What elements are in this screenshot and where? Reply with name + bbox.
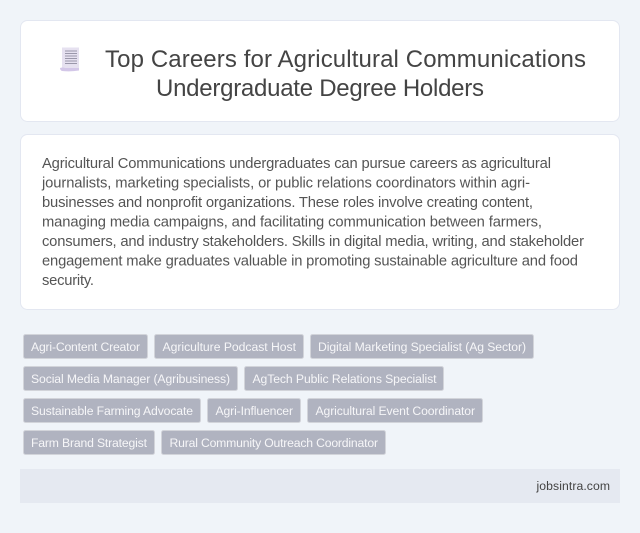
description text <box>41 156 584 289</box>
title <box>105 46 586 102</box>
footer source: jobsintra.com <box>536 479 610 493</box>
career tags <box>24 334 534 454</box>
tag: Agricultural Event Coordinator <box>316 404 475 418</box>
description text: engagement make graduates valuable in promoting sustainable agriculture and food <box>42 254 578 270</box>
icon: document scroll <box>60 48 79 71</box>
tag <box>310 334 534 358</box>
tag <box>24 334 148 358</box>
tag: Digital Marketing Specialist (Ag Sector) <box>318 340 526 354</box>
tag: Social Media Manager (Agribusiness) <box>31 372 230 386</box>
tag: AgTech Public Relations Specialist <box>252 372 437 386</box>
tag <box>24 398 200 422</box>
description text: businesses and nonprofit organizations. These roles involve creating content, <box>42 195 533 211</box>
description text: managing media campaigns, and facilitating communication between farmers, <box>42 214 542 230</box>
panel: description <box>20 134 620 310</box>
description text: consumers, and industry stakeholders. Skills in digital media, writing, and stakeholder <box>42 234 584 250</box>
tag <box>244 366 444 390</box>
description text: security. <box>42 273 94 289</box>
tag <box>308 398 482 422</box>
title: Top Careers for Agricultural Communications <box>105 46 586 73</box>
description text: Agricultural Communications undergraduates can pursue careers as agricultural <box>42 156 551 172</box>
tag: Rural Community Outreach Coordinator <box>170 436 378 450</box>
tag: Farm Brand Strategist <box>31 436 148 450</box>
tag: Agri-Influencer <box>216 404 293 418</box>
tag <box>154 334 304 358</box>
tag: Agri-Content Creator <box>31 340 140 354</box>
tag <box>24 430 154 454</box>
tag <box>24 366 238 390</box>
title: Undergraduate Degree Holders <box>156 75 484 102</box>
tag: Agriculture Podcast Host <box>162 340 297 354</box>
panel: title card <box>20 20 620 122</box>
tag <box>162 430 386 454</box>
footer <box>20 469 620 503</box>
description text: journalists, marketing specialists, or public relations coordinators within agri- <box>41 176 530 192</box>
tag: Sustainable Farming Advocate <box>31 404 193 418</box>
tag <box>208 398 300 422</box>
